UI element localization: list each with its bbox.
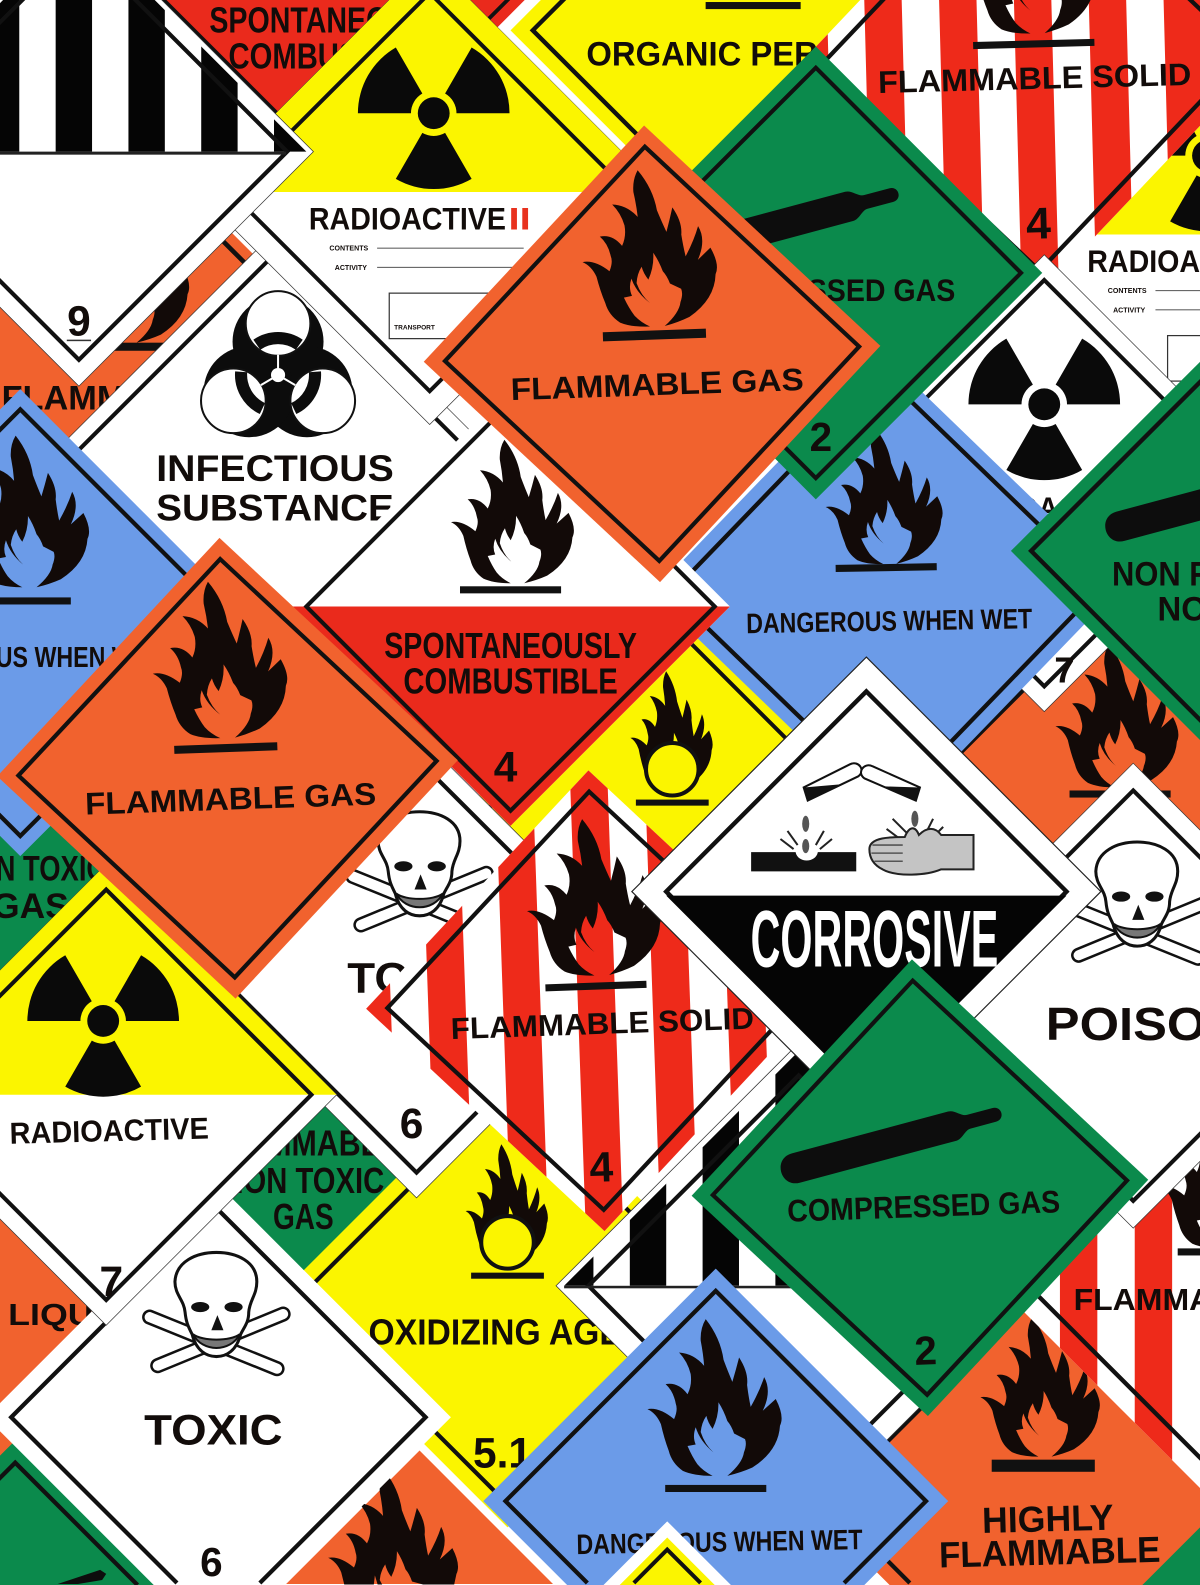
black lower panel <box>666 896 1067 1096</box>
icon: skull and crossbones <box>1071 842 1200 958</box>
form fields: CONTENTS <box>329 246 369 253</box>
icon: radiation trefoil <box>960 334 1129 480</box>
placard: non toxic gas, middle: GAS <box>273 1196 334 1237</box>
placard: flammable, middle right <box>883 583 1200 1038</box>
label text: COMPRESSED GAS <box>682 273 955 308</box>
icon: flame <box>451 440 574 583</box>
placard: highly flammable, bottom right <box>806 1264 1200 1585</box>
icon: gas cylinder <box>1102 457 1200 545</box>
placard: non toxic gas, middle <box>71 890 536 1355</box>
label text: FLAMMABLE GAS <box>85 777 377 822</box>
class number: 4 <box>494 743 518 790</box>
icon: flame <box>1159 1102 1200 1248</box>
label text: FLAMMABLE GAS <box>510 362 804 407</box>
placard: flammable liquid, lower left <box>0 1092 182 1516</box>
class number: 5.1 <box>473 1430 532 1477</box>
placard: radioactive II, top: II <box>509 201 531 236</box>
form fields <box>1108 288 1200 381</box>
class number: 4 <box>589 1143 614 1191</box>
label text: TOXIC <box>347 955 486 1002</box>
placard: flammable, bottom center <box>286 1451 553 1584</box>
icon: flame <box>824 427 943 565</box>
class number: 2 <box>810 414 832 460</box>
label text: FLAMMABLE <box>2 379 219 417</box>
placard: toxic 6, center <box>184 733 649 1198</box>
placard: radioactive 7, white <box>816 255 1200 712</box>
icon: flame over circle <box>630 671 713 806</box>
label text: FLAMMABLE <box>207 1122 399 1163</box>
icon: flame <box>980 1317 1100 1457</box>
class number: 6 <box>200 1539 223 1585</box>
placard: toxic, bottom left <box>0 1185 451 1585</box>
icon: gas cylinder <box>674 179 902 267</box>
placard: class 9 striped <box>0 0 313 386</box>
placard: spontaneously combustible, center <box>291 387 730 826</box>
placard: oxidizing agent 5.1 <box>277 1066 738 1527</box>
label text: RADIOACTIVE <box>9 1113 209 1151</box>
icon: skull and crossbones <box>150 1252 283 1369</box>
placard: spontaneously combustible, top <box>128 0 543 189</box>
placard: poison <box>901 763 1200 1228</box>
icon: flame <box>59 191 189 343</box>
placard: class 8 striped, bottom center <box>556 1043 1041 1528</box>
label text: HIGHLY <box>982 1497 1114 1541</box>
placard: infectious substance: SUBSTANCE <box>156 487 394 529</box>
icon: flame <box>0 436 89 587</box>
icon: flame <box>963 0 1097 35</box>
label text: ORGANIC PEROXIDE <box>586 36 920 74</box>
icon: flame <box>150 579 289 740</box>
form fields: CONTENTS <box>1108 288 1147 295</box>
label text: FLAMMABLE SOLID <box>450 1003 754 1046</box>
placard: dangerous when wet, center <box>647 350 1126 829</box>
label text: RADIOACTIVE <box>948 493 1140 526</box>
placard: radioactive II, top <box>197 0 662 425</box>
icon: flame <box>328 1471 458 1584</box>
form fields <box>329 246 524 339</box>
icon: biohazard <box>201 291 355 437</box>
icon: gas cylinder <box>58 1570 106 1584</box>
placard: radioactive, upper right <box>976 2 1200 467</box>
label text: COMPRESSED GAS <box>787 1184 1061 1229</box>
placard: green corner, bottom right <box>1142 1413 1200 1585</box>
class number: 7 <box>99 1258 123 1305</box>
label text: TOXIC <box>144 1406 283 1453</box>
placard: non toxic gas, left edge <box>0 596 248 1031</box>
placard: compressed gas, top <box>589 46 1042 499</box>
form fields: ACTIVITY <box>1113 307 1146 314</box>
placard: compressed gas, bottom right <box>684 951 1156 1424</box>
class number: 9 <box>67 298 91 345</box>
placard: corrosive <box>632 657 1101 1126</box>
placard: flammable liquid, upper left <box>0 120 367 616</box>
class number: 7 <box>1054 649 1075 690</box>
placard: flammable solid, center <box>358 762 835 1239</box>
icon: radiation trefoil <box>349 42 518 189</box>
label text: DANGEROUS WHEN WET <box>576 1523 863 1560</box>
icon: flame over circle <box>466 1144 548 1279</box>
icon: flame <box>1055 644 1178 787</box>
icon: flame <box>579 168 719 329</box>
form fields: ACTIVITY <box>335 265 367 272</box>
placard: non flammable gas, far right <box>1011 313 1200 788</box>
label text: RADIOACTIVE <box>309 201 506 236</box>
placard: radioactive, left <box>0 864 337 1325</box>
placard: infectious substance <box>49 234 497 682</box>
icon: radiation trefoil <box>19 950 188 1097</box>
icon: radiation trefoil <box>1123 85 1200 231</box>
placard: organic peroxide <box>511 0 996 273</box>
icon: skull and crossbones <box>353 812 486 928</box>
class number: 4 <box>1025 199 1052 249</box>
label text: SPONTANEOUSLY <box>209 0 462 40</box>
label text: DANGEROUS WHEN WET <box>746 602 1032 639</box>
placard: dangerous when wet, left edge <box>0 389 254 856</box>
icon: test tubes, drops, bar and hand <box>751 763 974 875</box>
class number: 2 <box>914 1327 938 1374</box>
placard: small yellow, bottom tip <box>604 1521 731 1585</box>
placard: dangerous when wet, bottom <box>483 1269 948 1585</box>
placard: highly flammable, bottom right: FLAMMABLE <box>938 1529 1161 1576</box>
placard: flammable solid, top right <box>793 0 1200 300</box>
label text: SPONTANEOUSLY <box>384 625 637 666</box>
placard: compressed gas, bottom left <box>0 1440 160 1585</box>
placard: spontaneously combustible, top: COMBUSTIBLE <box>229 36 443 77</box>
placard: non toxic gas, middle: NON TOXIC <box>222 1160 384 1201</box>
class number: 6 <box>400 1100 423 1147</box>
placard: flammable gas, left <box>0 530 466 1007</box>
label text: INFECTIOUS <box>156 447 394 489</box>
icon: flame <box>647 1319 782 1476</box>
placard: flammable gas, center <box>416 118 888 590</box>
label text: LIQUID <box>8 1299 129 1332</box>
placard: flammable solid, right <box>981 1021 1200 1516</box>
icon: gas cylinder <box>777 1098 1005 1187</box>
label text: OXIDIZING AGENT <box>369 1311 667 1352</box>
label text: FLAMMABLE SOLID <box>878 57 1192 100</box>
form fields: TRANSPORT <box>394 325 435 332</box>
placard: spontaneously combustible, center: COMBUSTIBLE <box>403 660 618 701</box>
placard: oxidizer, middle <box>448 602 897 1051</box>
icon: flame <box>524 817 663 978</box>
